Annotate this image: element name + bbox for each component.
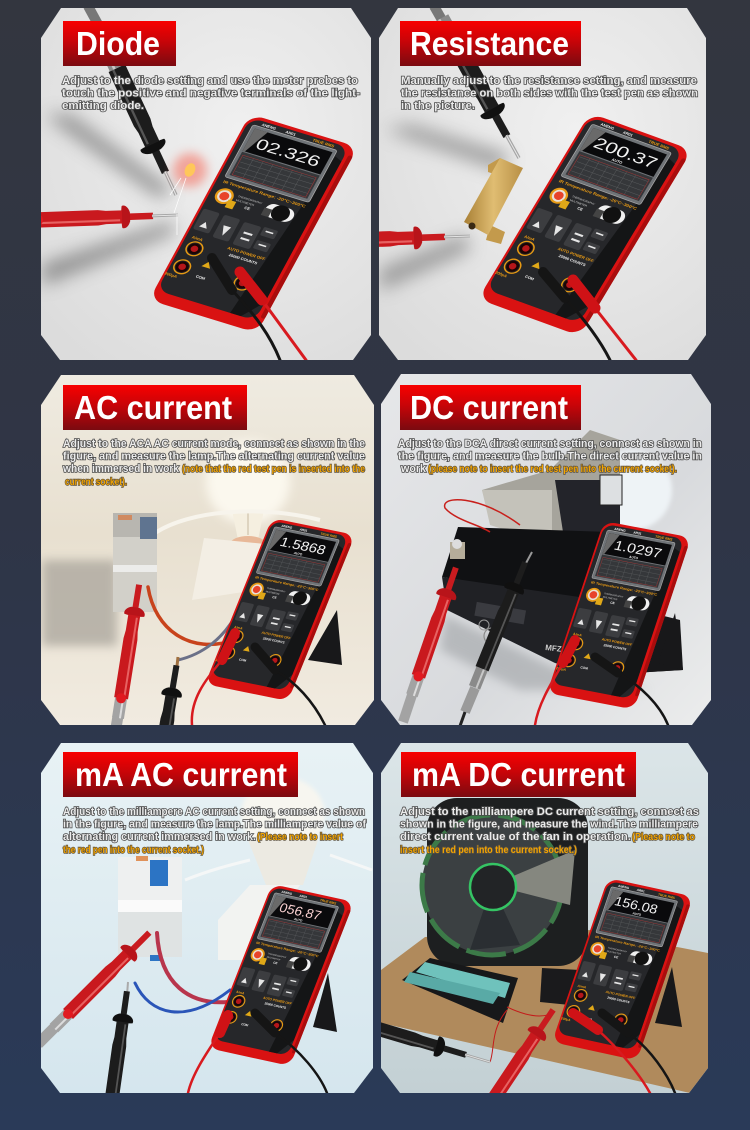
wooden board: [381, 930, 708, 1093]
multimeter: IR Temperature Range: -20°C~300°C: [595, 935, 661, 953]
multimeter: THERMOGRAPHY: [266, 587, 286, 594]
icon: red probe: [470, 1004, 562, 1128]
multimeter: 25000 COUNTS: [262, 636, 285, 645]
shadow under battery: [437, 614, 556, 694]
icon: fan connector: [540, 968, 580, 1005]
multimeter: 25000 COUNTS: [603, 643, 628, 652]
multimeter: THERMOGRAPHY: [571, 194, 596, 206]
multimeter: CE: [613, 955, 619, 960]
multimeter: AR01: [285, 129, 298, 137]
multimeter: [205, 518, 355, 701]
icon: black probe: [159, 656, 182, 725]
probe shadows: [380, 125, 510, 290]
text block: mA DC instructions: [400, 806, 699, 856]
multimeter: MULTIMETER: [569, 198, 588, 208]
multimeter: IR Temperature Range: -20°C~300°C: [255, 941, 320, 958]
icon: black probe: [98, 982, 137, 1126]
wires: [135, 933, 230, 1012]
icon: red probe: [379, 226, 470, 250]
multimeter: IR Temperature Range: -20°C~300°C: [254, 575, 320, 592]
heading: Resistance: Resistance: [410, 25, 569, 62]
meter stand: [313, 973, 337, 1032]
text block: AC current instructions: when immersed in work: [62, 463, 180, 475]
multimeter: TRUE RMS: [648, 139, 670, 151]
multimeter: AUTO: [611, 157, 624, 165]
multimeter: ANENG: [281, 890, 293, 896]
multimeter: COM: [584, 1016, 593, 1022]
multimeter: 156.08: [613, 893, 660, 917]
text block: mA DC instructions: Adjust to the milliampere DC current setting, connect as: [400, 806, 699, 818]
icon: metal disc: [620, 450, 673, 528]
multimeter: 200µA: [215, 658, 226, 664]
multimeter: ANENG: [261, 122, 277, 131]
text block: diode instructions: emitting diode.: [62, 100, 144, 112]
text block: AC current instructions: current socket).: [65, 476, 127, 488]
text block: diode instructions: [62, 75, 360, 112]
multimeter: 200.37: [590, 135, 661, 172]
breaker shadow: [42, 560, 117, 646]
heading: Diode: Diode: [76, 25, 160, 62]
multimeter: 1.0297: [612, 538, 664, 561]
multimeter: ANENG: [617, 884, 630, 890]
icon: black probe: [436, 14, 520, 159]
multimeter: [149, 114, 358, 333]
multimeter: MULTIMETER: [606, 951, 621, 956]
multimeter: COM: [524, 274, 535, 281]
icon: gold resistor: [464, 158, 523, 244]
multimeter: 25000 COUNTS: [264, 1001, 287, 1010]
multimeter: MULTIMETER: [602, 597, 618, 601]
text block: resistance instructions: in the picture.: [401, 100, 475, 112]
multimeter: 056.87: [277, 900, 324, 923]
test leads: [543, 272, 636, 360]
text block: mA DC instructions: shown in the figure, and measure the wind.The milliampere: [400, 818, 698, 830]
red and black wires: [490, 1007, 555, 1062]
panel: mA DC current: [334, 743, 708, 1128]
text block: mA AC instructions: in the figure, and measure the lamp.The milliampere value of: [63, 818, 366, 830]
multimeter: AUTO POWER OFF: [605, 990, 636, 1000]
heading: AC current: AC current: [74, 389, 232, 426]
text block: mA AC instructions: Adjust to the milliampere AC current setting, connect as shown: [63, 806, 365, 818]
multimeter: ANENG: [600, 122, 615, 131]
text block: resistance instructions: Manually adjust to the resistance setting, and measure: [401, 75, 697, 87]
multimeter: IR Temperature Range: -20°C~300°C: [222, 179, 307, 209]
multimeter: 200µA: [560, 1016, 572, 1022]
text block: diode instructions: touch the positive and negative terminals of the light-: [62, 88, 360, 100]
multimeter: TRUE RMS: [655, 535, 674, 542]
icon: black probe: [334, 1007, 493, 1072]
multimeter: AUTO: [632, 911, 642, 917]
multimeter: CE: [273, 961, 278, 965]
text block: AC current instructions: [62, 438, 365, 488]
multimeter: THERMOGRAPHY: [604, 592, 624, 599]
icon: black probe: [107, 66, 178, 196]
text block: mA AC instructions: [63, 806, 366, 856]
multimeter: THERMOGRAPHY: [607, 947, 628, 954]
icon: red probe: [38, 925, 157, 1044]
multimeter: COM: [195, 274, 206, 281]
multimeter: ANENG: [614, 527, 627, 533]
multimeter: IR Temperature Range: -20°C~300°C: [590, 580, 658, 597]
text block: DC current instructions: Adjust to the DCA direct current setting, connect as shown in: [398, 438, 702, 450]
multimeter: 200µA: [494, 270, 508, 278]
black probe cable top: [84, 8, 102, 21]
probe shadows: [42, 115, 176, 285]
multimeter: COM: [241, 1022, 249, 1028]
text block: mA AC instructions: (Please note to insert: [257, 831, 343, 843]
icon: battery terminal: [450, 539, 465, 559]
panel: diode: [18, 6, 371, 360]
wires: [148, 587, 240, 660]
white lamp base: [192, 538, 262, 600]
multimeter: TRUE RMS: [312, 138, 336, 149]
text block: AC current instructions: figure, and measure the lamp.The alternating current value: [63, 450, 365, 462]
multimeter: [552, 878, 693, 1060]
multimeter: 25000 COUNTS: [607, 996, 630, 1004]
meter stand: [655, 967, 682, 1027]
multimeter: MULTIMETER: [266, 957, 281, 962]
multimeter: A/mA: [523, 234, 536, 242]
multimeter: TRUE RMS: [657, 893, 676, 900]
multimeter: IR Temperature Range: -20°C~300°C: [558, 179, 638, 211]
meter stand: [308, 610, 342, 665]
multimeter: CE: [243, 205, 252, 211]
multimeter: AUTO: [293, 917, 304, 923]
multimeter: MULTIMETER: [235, 198, 255, 207]
multimeter: AUTO: [629, 555, 639, 560]
multimeter: A/mA: [234, 625, 244, 631]
icon: battery: [442, 527, 683, 675]
text block: DC current instructions: the figure, and measure the bulb.The direct current value in: [398, 450, 702, 462]
icon: battery holder: [402, 958, 518, 1023]
multimeter: AR01: [299, 894, 308, 899]
red jumper wire: [445, 500, 520, 532]
multimeter: TRUE RMS: [320, 532, 338, 539]
multimeter: AUTO POWER OFF: [261, 631, 291, 640]
multimeter: [208, 884, 354, 1066]
icon: circuit breaker: [113, 513, 157, 612]
multimeter: 25000 COUNTS: [228, 253, 259, 266]
multimeter: AR01: [636, 888, 646, 894]
test leads: [573, 1013, 675, 1093]
test leads: [188, 1013, 327, 1093]
panel: mA AC current: [38, 743, 373, 1126]
multimeter: [478, 113, 692, 336]
multimeter: A/mA: [235, 990, 246, 996]
multimeter: AR01: [633, 531, 642, 536]
multimeter: 200µA: [164, 271, 178, 279]
text block: diode instructions: Adjust to the diode setting and use the meter probes to: [62, 75, 358, 87]
icon: cooling fan: [422, 798, 588, 966]
multimeter: AR01: [299, 527, 308, 533]
multimeter: A/mA: [572, 632, 583, 638]
icon: black probe: [460, 552, 535, 726]
black probe cable top: [434, 6, 442, 20]
multimeter: A/mA: [191, 235, 204, 242]
text block: DC current instructions: work: [400, 463, 427, 475]
multimeter: 200µA: [556, 666, 567, 672]
text block: mA DC instructions: direct current value of the fan in operation.: [400, 831, 631, 843]
icon: light bulb: [206, 440, 290, 552]
text block: DC current instructions: [398, 438, 702, 475]
multimeter: AUTO POWER OFF: [263, 996, 292, 1006]
battery label: MFZ: [545, 643, 562, 654]
icon: red probe: [111, 584, 145, 725]
multimeter: 1.5868: [278, 534, 328, 558]
multimeter: CE: [576, 206, 584, 212]
test leads: [212, 258, 306, 360]
text block: mA AC instructions: the red pen into the current socket.): [63, 844, 204, 856]
multimeter: [547, 521, 691, 710]
multimeter: AUTO POWER OFF: [557, 246, 595, 263]
multimeter: COM: [580, 665, 589, 671]
multimeter: AUTO: [293, 551, 304, 557]
test leads: [192, 633, 325, 725]
text block: AC current instructions: Adjust to the ACA AC current mode, connect as shown in the: [63, 438, 365, 450]
multimeter: ANENG: [281, 524, 294, 530]
icon: LED bulb: [241, 777, 325, 885]
multimeter: THERMOGRAPHY: [267, 952, 287, 959]
icon: red probe: [41, 206, 178, 228]
icon: red probe: [402, 564, 466, 722]
text block: mA DC instructions: (Please note to: [632, 831, 695, 843]
multimeter: A/mA: [577, 984, 587, 990]
icon: glowing LED: [170, 153, 207, 235]
multimeter: 25000 COUNTS: [558, 253, 587, 267]
text block: mA DC instructions: insert the red pen into the current socket.): [400, 844, 577, 856]
multimeter: TRUE RMS: [319, 898, 338, 906]
heading: Diode: [63, 21, 176, 66]
meter stand: [673, 613, 683, 670]
heading: DC current: DC current: [410, 389, 568, 426]
text block: resistance instructions: the resistance on both sides with the test pen as shown: [401, 88, 698, 100]
multimeter: AUTO POWER OFF: [227, 246, 267, 261]
multimeter: THERMOGRAPHY: [237, 194, 263, 205]
multimeter: CE: [272, 595, 277, 600]
multimeter: CE: [610, 601, 616, 605]
heading: mA DC current: mA DC current: [412, 756, 625, 793]
white box and cable: [218, 885, 300, 960]
heading: mA AC current: mA AC current: [75, 756, 287, 793]
text block: DC current instructions: (please note to insert the red test pen into the current socket).: [428, 463, 677, 475]
panel: resistance: [379, 8, 706, 360]
test leads: [535, 640, 668, 725]
panel: DC current: [381, 374, 711, 726]
multimeter: AUTO POWER OFF: [601, 637, 633, 647]
text block: resistance instructions: [401, 75, 698, 112]
text block: AC current instructions: (note that the red test pen is inserted into the: [182, 463, 365, 475]
multimeter: MULTIMETER: [265, 591, 280, 596]
multimeter: COM: [238, 658, 247, 663]
multimeter: 200µA: [217, 1022, 229, 1028]
icon: circuit breaker: [118, 856, 182, 961]
multimeter: AR01: [622, 130, 635, 138]
panel: AC current: [41, 375, 374, 725]
lamp assembly: [482, 430, 622, 532]
multimeter: 02.326: [252, 136, 323, 170]
text block: mA AC instructions: alternating current immersed in work.: [63, 831, 256, 843]
